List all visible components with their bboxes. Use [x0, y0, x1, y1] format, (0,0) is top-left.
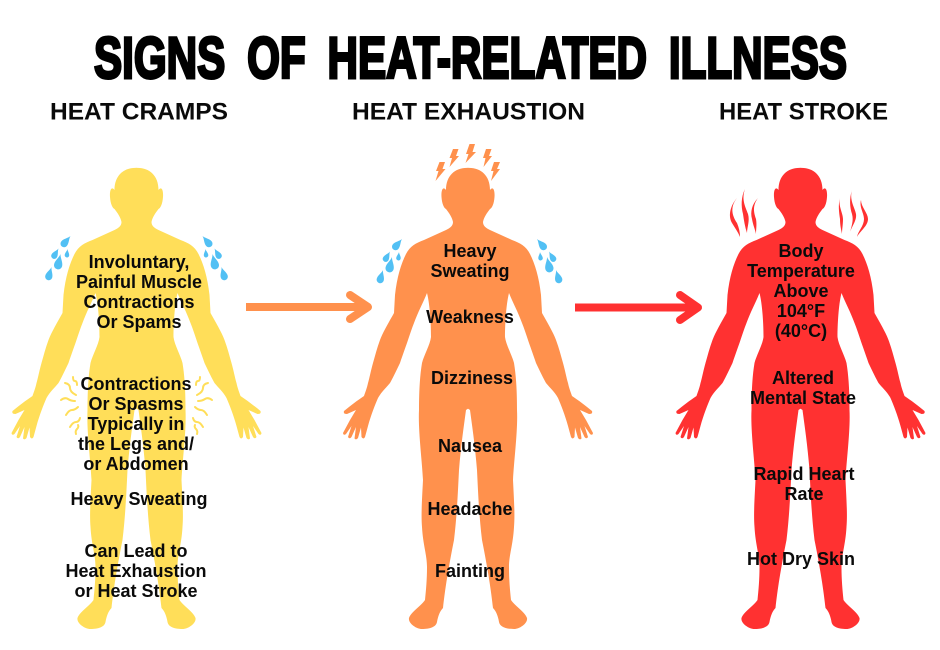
text: rapid heart rate: Rate — [784, 484, 824, 504]
text: contractions in legs: Contractions — [80, 374, 192, 394]
heading: heat cramps: HEAT CRAMPS — [50, 98, 228, 126]
heading: heat stroke: HEAT STROKE — [719, 98, 888, 126]
icon: sweat drops left — [376, 237, 405, 284]
text: body temperature: 104°F — [777, 301, 825, 321]
text: heavy sweating: Heavy — [443, 241, 497, 261]
text: body temperature: Above — [773, 281, 829, 301]
arrow: exhaustion to stroke — [575, 295, 698, 320]
panel: heat stroke — [676, 168, 926, 629]
icon: heat waves left — [730, 189, 758, 237]
text: body temperature: (40°C) — [775, 321, 827, 341]
icon: cramp squiggles left — [61, 377, 80, 434]
icon: sweat drops right — [534, 237, 563, 284]
text: body temperature: Temperature — [747, 261, 855, 281]
text: rapid heart rate: Rapid Heart — [753, 464, 855, 484]
text: dizziness: Dizziness — [431, 368, 513, 388]
text: can lead to: Heat Exhaustion — [65, 561, 207, 581]
text: fainting: Fainting — [435, 561, 505, 581]
figure: yellow body — [12, 168, 262, 629]
text: heavy sweating: Sweating — [430, 261, 510, 281]
text: contractions in legs: Typically in — [88, 414, 184, 434]
text: headache: Headache — [427, 499, 513, 519]
figure: orange body — [343, 168, 593, 629]
panel: heat cramps — [12, 168, 262, 629]
icon: sweat drops left — [44, 234, 73, 281]
text: weakness: Weakness — [426, 307, 514, 327]
text: involuntary contractions: Or Spams — [96, 312, 182, 332]
icon: lightning bolts — [436, 144, 500, 181]
text: contractions in legs: Or Spasms — [88, 394, 184, 414]
text: altered mental state: Mental State — [750, 388, 856, 408]
text: involuntary contractions: Contractions — [83, 292, 195, 312]
panel: heat exhaustion — [343, 144, 593, 629]
arrow: cramps to exhaustion — [246, 295, 368, 319]
text: heavy sweating: Heavy Sweating — [70, 489, 208, 509]
text: involuntary contractions: Painful Muscle — [76, 272, 202, 292]
text: body temperature: Body — [778, 241, 824, 261]
text: contractions in legs: the Legs and/ — [78, 434, 194, 454]
text: can lead to: or Heat Stroke — [74, 581, 198, 601]
text: hot dry skin: Hot Dry Skin — [747, 549, 855, 569]
heading: heat exhaustion: HEAT EXHAUSTION — [352, 98, 585, 126]
text: can lead to: Can Lead to — [84, 541, 188, 561]
text: altered mental state: Altered — [772, 368, 834, 388]
icon: cramp squiggles right — [193, 377, 212, 434]
icon: heat waves right — [839, 190, 868, 237]
figure: red body — [676, 168, 926, 629]
icon: sweat drops right — [200, 234, 229, 281]
text: contractions in legs: or Abdomen — [83, 454, 189, 474]
text: involuntary contractions: Involuntary, — [89, 252, 189, 272]
text: nausea: Nausea — [438, 436, 503, 456]
